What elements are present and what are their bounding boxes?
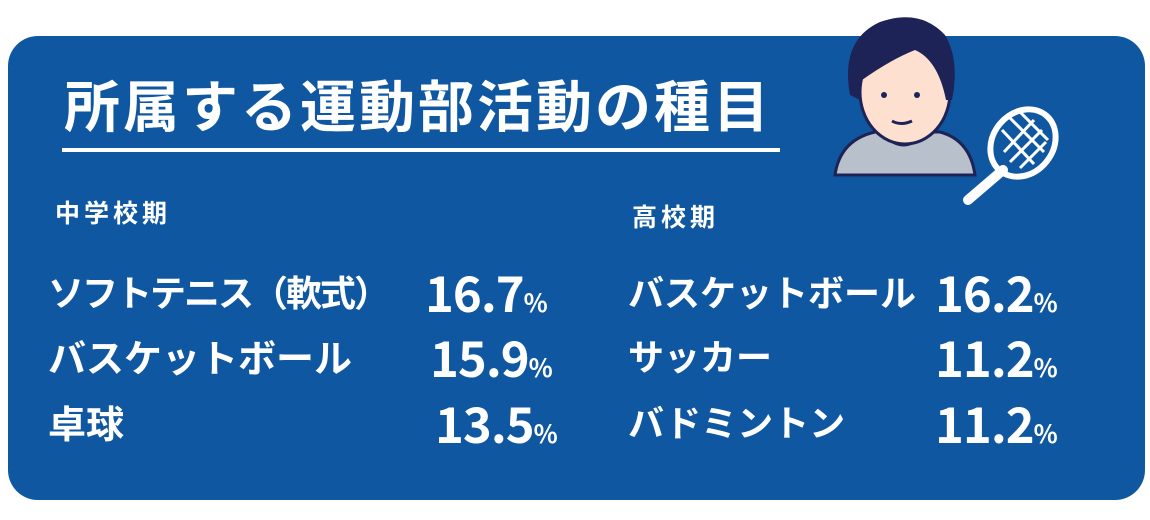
section heading: junior high: 中学校期 [55, 194, 171, 230]
row 3: バドミントン [628, 395, 845, 447]
row 2: サッカー [628, 329, 772, 381]
list: junior high: 15.9% [430, 321, 553, 392]
list: junior high: 13.5% [435, 387, 558, 458]
list: high school: 11.2% [935, 321, 1058, 392]
illustration: person [833, 17, 1059, 205]
list: high school: 16.2% [935, 256, 1058, 327]
list: high school [628, 256, 1058, 458]
row 2: バスケットボール [48, 328, 352, 383]
title: 所属する運動部活動の種目 [64, 63, 772, 144]
section heading: high school: 高校期 [632, 198, 719, 234]
row 3: 卓球 [48, 394, 124, 449]
row 1: ソフトテニス（軟式） [48, 265, 388, 317]
icon: tennis racket [968, 96, 1069, 200]
row 1: バスケットボール [628, 265, 916, 317]
list: junior high [48, 256, 558, 458]
title underline [62, 148, 780, 152]
list: high school: 11.2% [935, 387, 1058, 458]
list: junior high: 16.7% [425, 256, 548, 327]
